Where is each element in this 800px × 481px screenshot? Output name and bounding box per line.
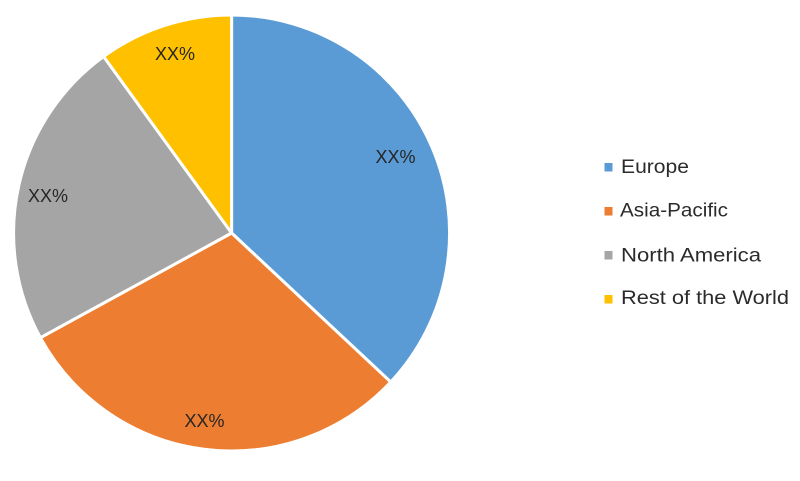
label: Europe value: XX% xyxy=(376,147,416,167)
slice: North America xyxy=(14,56,232,338)
legend item: Asia-Pacific: Asia-Pacific xyxy=(620,200,728,222)
slice: Europe xyxy=(232,15,450,382)
pie chart xyxy=(14,15,450,451)
slice: Rest of the World xyxy=(104,15,232,233)
label: Rest of the World value: XX% xyxy=(155,44,195,64)
label: Asia-Pacific value: XX% xyxy=(184,411,224,431)
label: North America value: XX% xyxy=(28,186,68,206)
legend xyxy=(604,156,789,309)
data labels xyxy=(28,44,416,431)
legend item: Rest of the World: Rest of the World xyxy=(621,287,789,309)
legend item: North America: North America xyxy=(621,244,761,266)
slice: Asia-Pacific xyxy=(40,233,391,451)
legend item: Europe: Europe xyxy=(621,156,689,178)
